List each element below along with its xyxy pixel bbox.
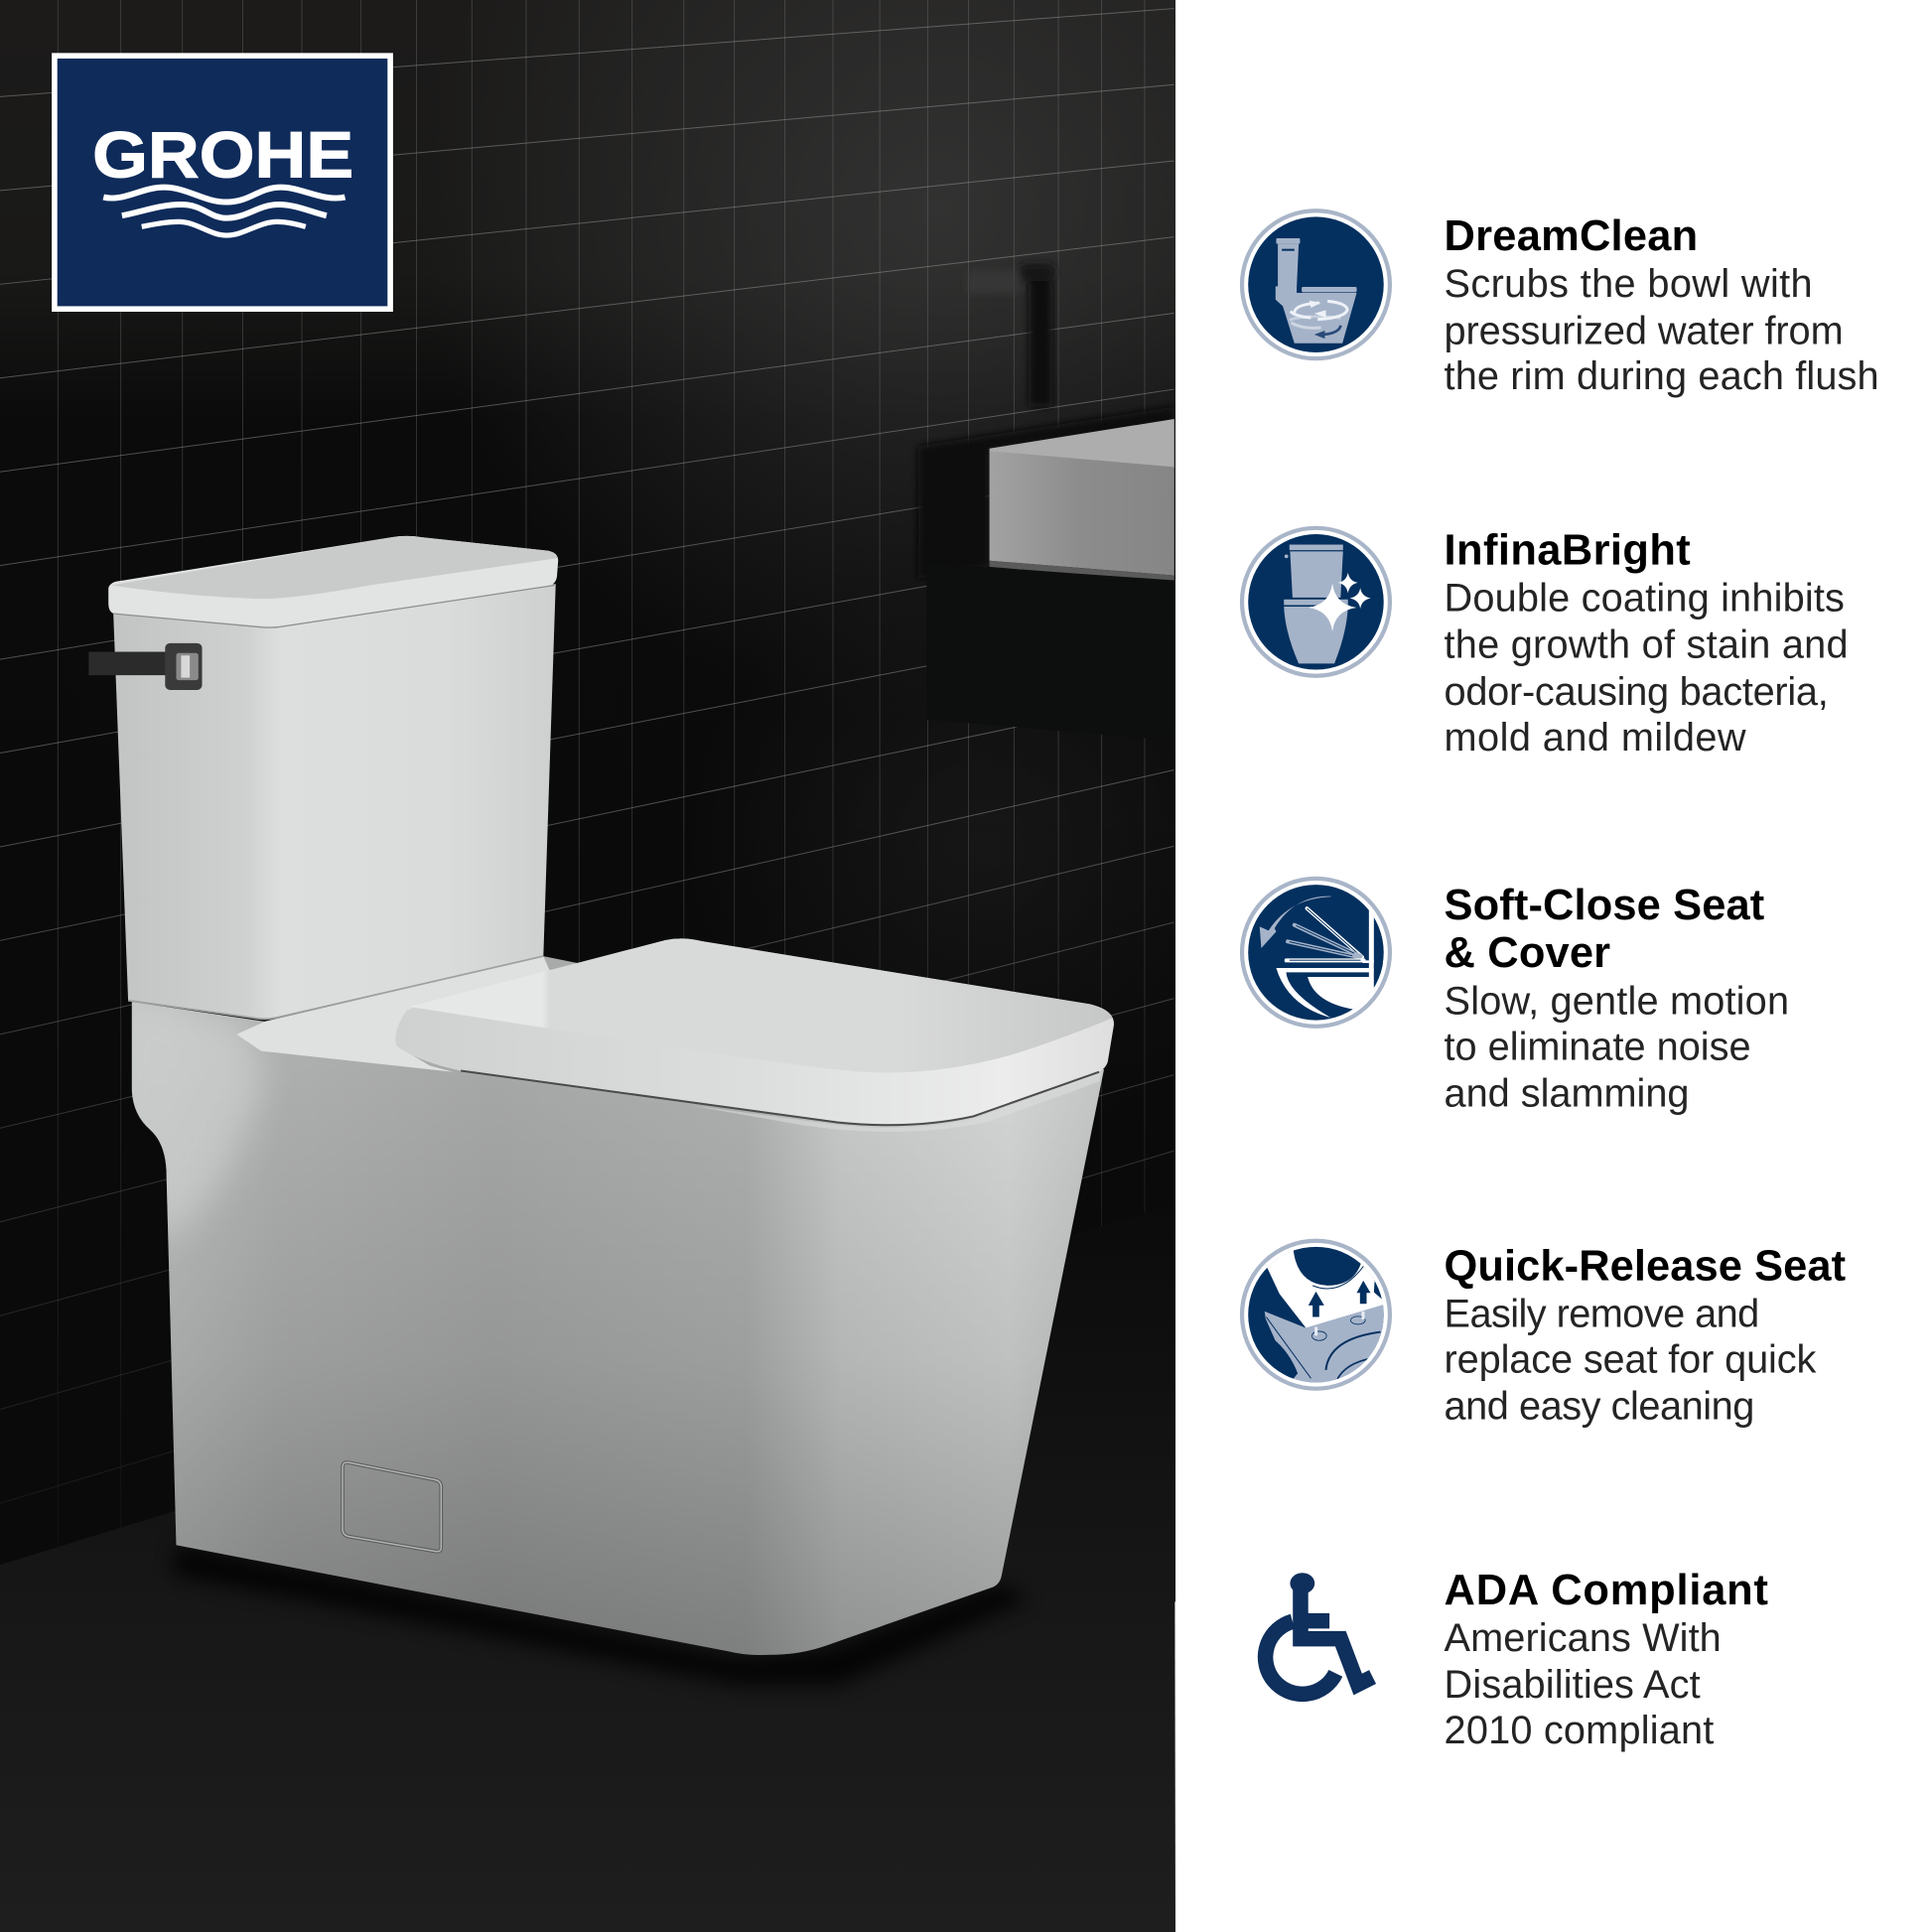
heading: ADA Compliant xyxy=(1445,1567,1768,1614)
description: Double coating inhibits xyxy=(1445,577,1845,621)
icon: wheelchair xyxy=(1266,1573,1373,1694)
heading: InfinaBright xyxy=(1445,526,1691,574)
deck behind seat xyxy=(236,956,552,1072)
GROHE logo xyxy=(52,53,393,312)
arrow xyxy=(1260,897,1330,948)
description: the growth of stain and xyxy=(1445,623,1849,667)
toilet tank xyxy=(88,536,558,1019)
floor xyxy=(0,1439,1175,1932)
toilet xyxy=(88,536,1114,1655)
description xyxy=(1445,577,1849,759)
description: Scrubs the bowl with xyxy=(1445,262,1813,306)
rim highlight xyxy=(690,1072,1102,1132)
heading xyxy=(1445,882,1764,977)
icon: sparkling toilet xyxy=(1242,528,1390,676)
icon: seat lifting off hinges xyxy=(1242,1241,1391,1392)
faucet reflection xyxy=(967,264,1054,407)
description: and easy cleaning xyxy=(1445,1385,1754,1429)
description: 2010 compliant xyxy=(1445,1709,1714,1752)
description: Slow, gentle motion xyxy=(1445,979,1789,1023)
description: and slamming xyxy=(1445,1071,1690,1115)
vanity cabinet xyxy=(926,563,1174,741)
heading: Soft-Close Seat xyxy=(1445,882,1764,929)
description xyxy=(1445,979,1789,1115)
bowl xyxy=(1276,968,1374,1018)
description: replace seat for quick xyxy=(1445,1338,1816,1382)
upper left neck highlight xyxy=(131,1002,264,1237)
description: odor-causing bacteria, xyxy=(1445,670,1829,714)
wordmark: GROHE xyxy=(92,118,353,192)
description xyxy=(1445,1293,1816,1429)
feature: ADA Compliant xyxy=(1266,1567,1768,1752)
heading: Quick-Release Seat xyxy=(1445,1242,1846,1290)
flush handle xyxy=(88,643,203,690)
description xyxy=(1445,1616,1722,1752)
feature: Quick-Release Seat xyxy=(1242,1241,1846,1429)
toilet base xyxy=(104,956,1104,1655)
feature: DreamClean xyxy=(1242,210,1879,398)
description: Americans With xyxy=(1445,1616,1722,1660)
description: Easily remove and xyxy=(1445,1293,1759,1336)
feature: Soft-Close Seat and Cover xyxy=(1242,879,1789,1115)
tile wall xyxy=(0,0,1175,1601)
heading: DreamClean xyxy=(1445,212,1698,260)
description: to eliminate noise xyxy=(1445,1025,1751,1068)
description: the rim during each flush xyxy=(1445,354,1879,398)
description: pressurized water from xyxy=(1445,309,1844,352)
shelf shadow xyxy=(918,407,1174,579)
feature: InfinaBright xyxy=(1242,526,1849,759)
heading: & Cover xyxy=(1445,929,1610,977)
waves xyxy=(103,188,345,235)
floor shadow under toilet xyxy=(173,1545,1029,1686)
toilet seat xyxy=(395,938,1114,1125)
icon: toilet with swirling water xyxy=(1242,210,1390,358)
description: mold and mildew xyxy=(1445,716,1746,759)
sink xyxy=(990,419,1174,582)
access panel xyxy=(343,1462,441,1552)
tank lid xyxy=(108,536,558,627)
panel: bathroom photo xyxy=(0,0,1175,1932)
description: Disabilities Act xyxy=(1445,1663,1701,1707)
icon: closing seat xyxy=(1242,879,1391,1030)
description xyxy=(1445,262,1879,398)
